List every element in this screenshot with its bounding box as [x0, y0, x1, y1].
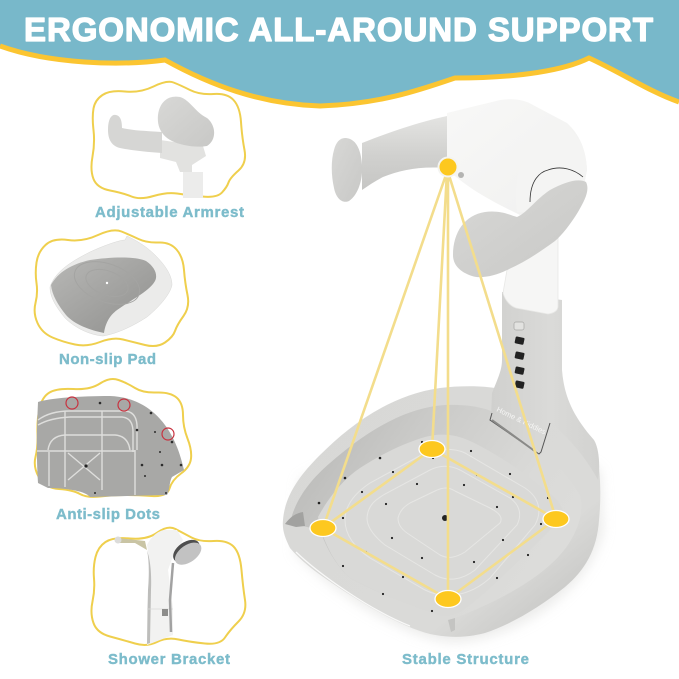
pad outline: [35, 230, 188, 346]
shower hose and handle: [170, 563, 173, 632]
side screw: [458, 172, 464, 178]
armrest handle: [108, 115, 162, 153]
title: ERGONOMIC ALL-AROUND SUPPORT: [24, 11, 653, 48]
bracket outline: [91, 528, 245, 645]
floor holes: [318, 441, 549, 612]
well wall: [290, 405, 582, 620]
underside holes: [94, 402, 182, 494]
bracket pole: [147, 530, 183, 645]
underside panel: [37, 396, 184, 497]
front notch: [448, 618, 455, 632]
left arm: [362, 116, 447, 190]
base body: [283, 386, 600, 637]
right arm pad: [453, 180, 587, 277]
pad white rim: [50, 236, 172, 336]
armrest pole: [183, 172, 203, 198]
left lip notch: [285, 512, 305, 527]
back marker: [419, 440, 445, 458]
red circles: [66, 397, 174, 440]
neck: [503, 235, 558, 314]
panel: adjustable armrest: [91, 82, 245, 198]
armrest outline: [91, 82, 245, 198]
label: Non-slip Pad: [59, 351, 156, 368]
logo plate: [490, 413, 550, 454]
front marker: [435, 590, 461, 608]
label: Shower Bracket: [108, 651, 230, 668]
height slots: [514, 336, 525, 389]
floor contours: [345, 449, 539, 595]
header banner: [0, 0, 679, 106]
support lines: [323, 172, 556, 599]
bracket arm: [118, 538, 147, 550]
panel: anti-slip dots: [35, 379, 191, 497]
left arm knob: [332, 138, 362, 202]
armrest mechanism: [160, 140, 206, 172]
panel: non-slip pad: [35, 230, 188, 346]
drain: [84, 464, 88, 468]
height button: [514, 322, 524, 330]
label: Anti-slip Dots: [56, 506, 160, 523]
apex marker: [438, 158, 458, 176]
column flare: [491, 292, 599, 480]
head housing: [447, 99, 587, 215]
soft shadow: [295, 400, 603, 642]
main product: stable structure seat: [283, 99, 603, 642]
label: Stable Structure: [402, 651, 529, 668]
panel: shower bracket: [91, 528, 245, 645]
pad ridges: [69, 254, 145, 312]
right marker: [543, 510, 569, 528]
left marker: [310, 520, 336, 536]
underside ribs: [37, 411, 137, 495]
pad grey floor: [51, 258, 156, 333]
seat floor: [318, 435, 562, 616]
pivot arc: [530, 168, 583, 202]
label: Adjustable Armrest: [95, 204, 244, 221]
dots outline: [35, 379, 191, 497]
shower head: [169, 535, 205, 569]
armrest pad: [158, 97, 214, 147]
housing cap: [516, 125, 587, 212]
brand text: Home & Kiddies: [495, 405, 548, 436]
base front highlight: [296, 552, 410, 626]
